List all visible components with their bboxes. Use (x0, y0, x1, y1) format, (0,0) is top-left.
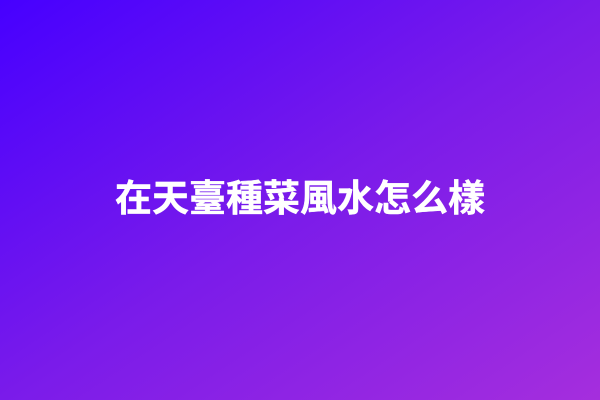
title: 在天臺種菜風水怎么樣 (115, 178, 485, 219)
